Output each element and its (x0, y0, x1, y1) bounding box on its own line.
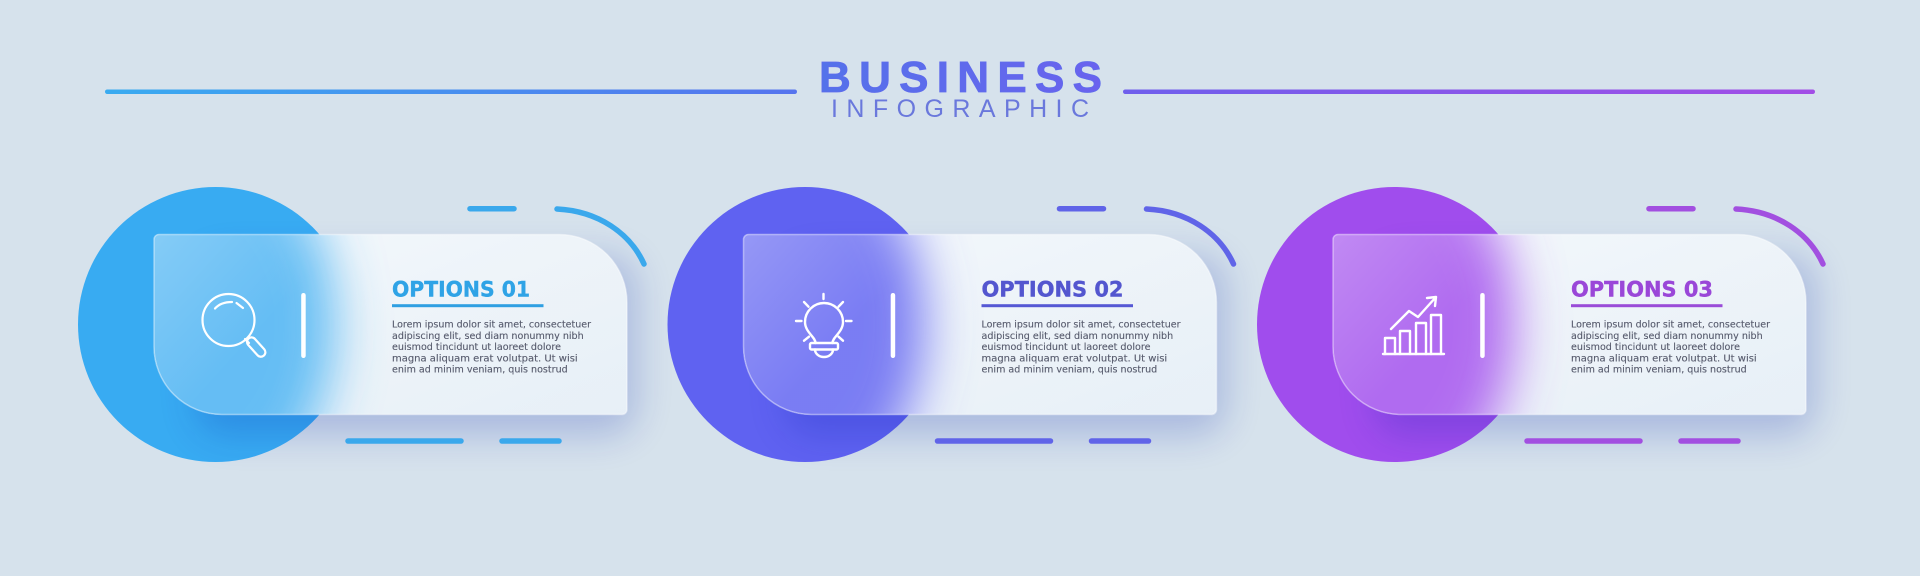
body text (982, 320, 1181, 376)
accent dashes and arc (348, 209, 644, 441)
body text: magna aliquam erat volutpat. Ut wisi (982, 353, 1167, 364)
body text: adipiscing elit, sed diam nonummy nibh (1571, 331, 1763, 342)
heading underline (392, 304, 544, 307)
body text: adipiscing elit, sed diam nonummy nibh (982, 331, 1173, 342)
icon: light bulb (796, 294, 852, 357)
panel: options 02 (668, 187, 1242, 462)
icon: bar chart with rising arrow (1383, 297, 1444, 354)
heading: OPTIONS 03 (1571, 278, 1713, 302)
heading: OPTIONS 01 (392, 278, 530, 302)
body text: adipiscing elit, sed diam nonummy nibh (392, 331, 584, 342)
body text (1571, 320, 1770, 376)
divider (1480, 293, 1485, 358)
left header line (105, 90, 797, 94)
glass card (154, 234, 627, 414)
card edge (744, 234, 1216, 414)
body text: euismod tincidunt ut laoreet dolore (392, 342, 561, 353)
heading: OPTIONS 02 (982, 278, 1124, 302)
body text: magna aliquam erat volutpat. Ut wisi (1571, 353, 1757, 364)
card shadow (1374, 256, 1816, 436)
divider (301, 293, 306, 358)
icon: magnifier (202, 294, 267, 359)
glass card (1333, 234, 1806, 414)
panel: options 03 (1257, 187, 1832, 462)
accent dashes and arc (1527, 209, 1823, 441)
glass card (744, 234, 1216, 414)
body text: enim ad minim veniam, quis nostrud (392, 365, 568, 376)
card shadow (195, 256, 637, 436)
subtitle: INFOGRAPHIC (831, 95, 1089, 123)
card shadow (784, 256, 1226, 436)
circle (1257, 187, 1532, 462)
body text: magna aliquam erat volutpat. Ut wisi (392, 353, 578, 364)
body text: Lorem ipsum dolor sit amet, consectetuer (982, 320, 1181, 331)
body text: euismod tincidunt ut laoreet dolore (982, 342, 1151, 353)
heading underline (1571, 304, 1722, 307)
heading underline (982, 304, 1133, 307)
panel: options 01 (78, 187, 652, 462)
circle (668, 187, 942, 462)
title: BUSINESS (819, 53, 1102, 102)
accent dashes and arc (938, 209, 1234, 441)
body text (392, 320, 591, 376)
body text: euismod tincidunt ut laoreet dolore (1571, 342, 1740, 353)
body text: Lorem ipsum dolor sit amet, consectetuer (1571, 320, 1770, 331)
card edge (154, 234, 627, 414)
body text: enim ad minim veniam, quis nostrud (1571, 365, 1747, 376)
divider (891, 293, 895, 358)
card edge (1333, 234, 1806, 414)
header (105, 53, 1815, 123)
body text: Lorem ipsum dolor sit amet, consectetuer (392, 320, 591, 331)
circle (78, 187, 353, 462)
body text: enim ad minim veniam, quis nostrud (982, 365, 1157, 376)
right header line (1123, 90, 1815, 94)
